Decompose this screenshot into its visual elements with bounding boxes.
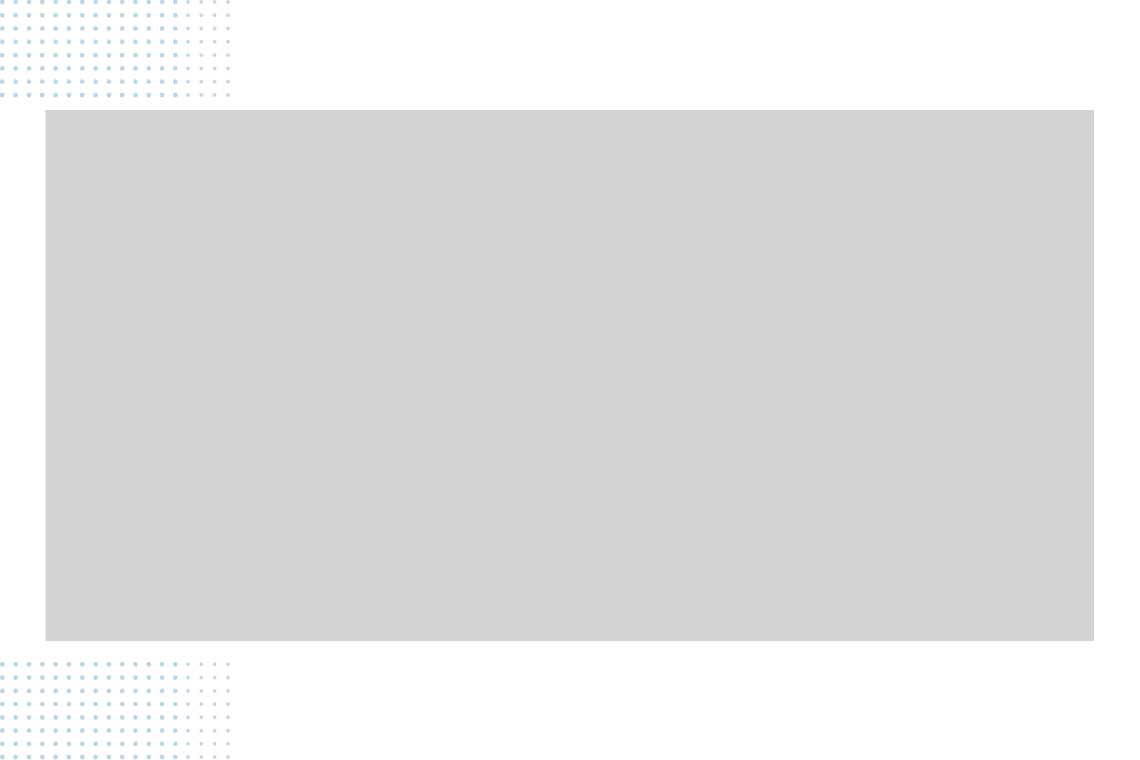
dot grid: bottom left [0,662,230,759]
panel: grey placeholder [46,110,1094,641]
dot grid: top left [0,0,230,97]
